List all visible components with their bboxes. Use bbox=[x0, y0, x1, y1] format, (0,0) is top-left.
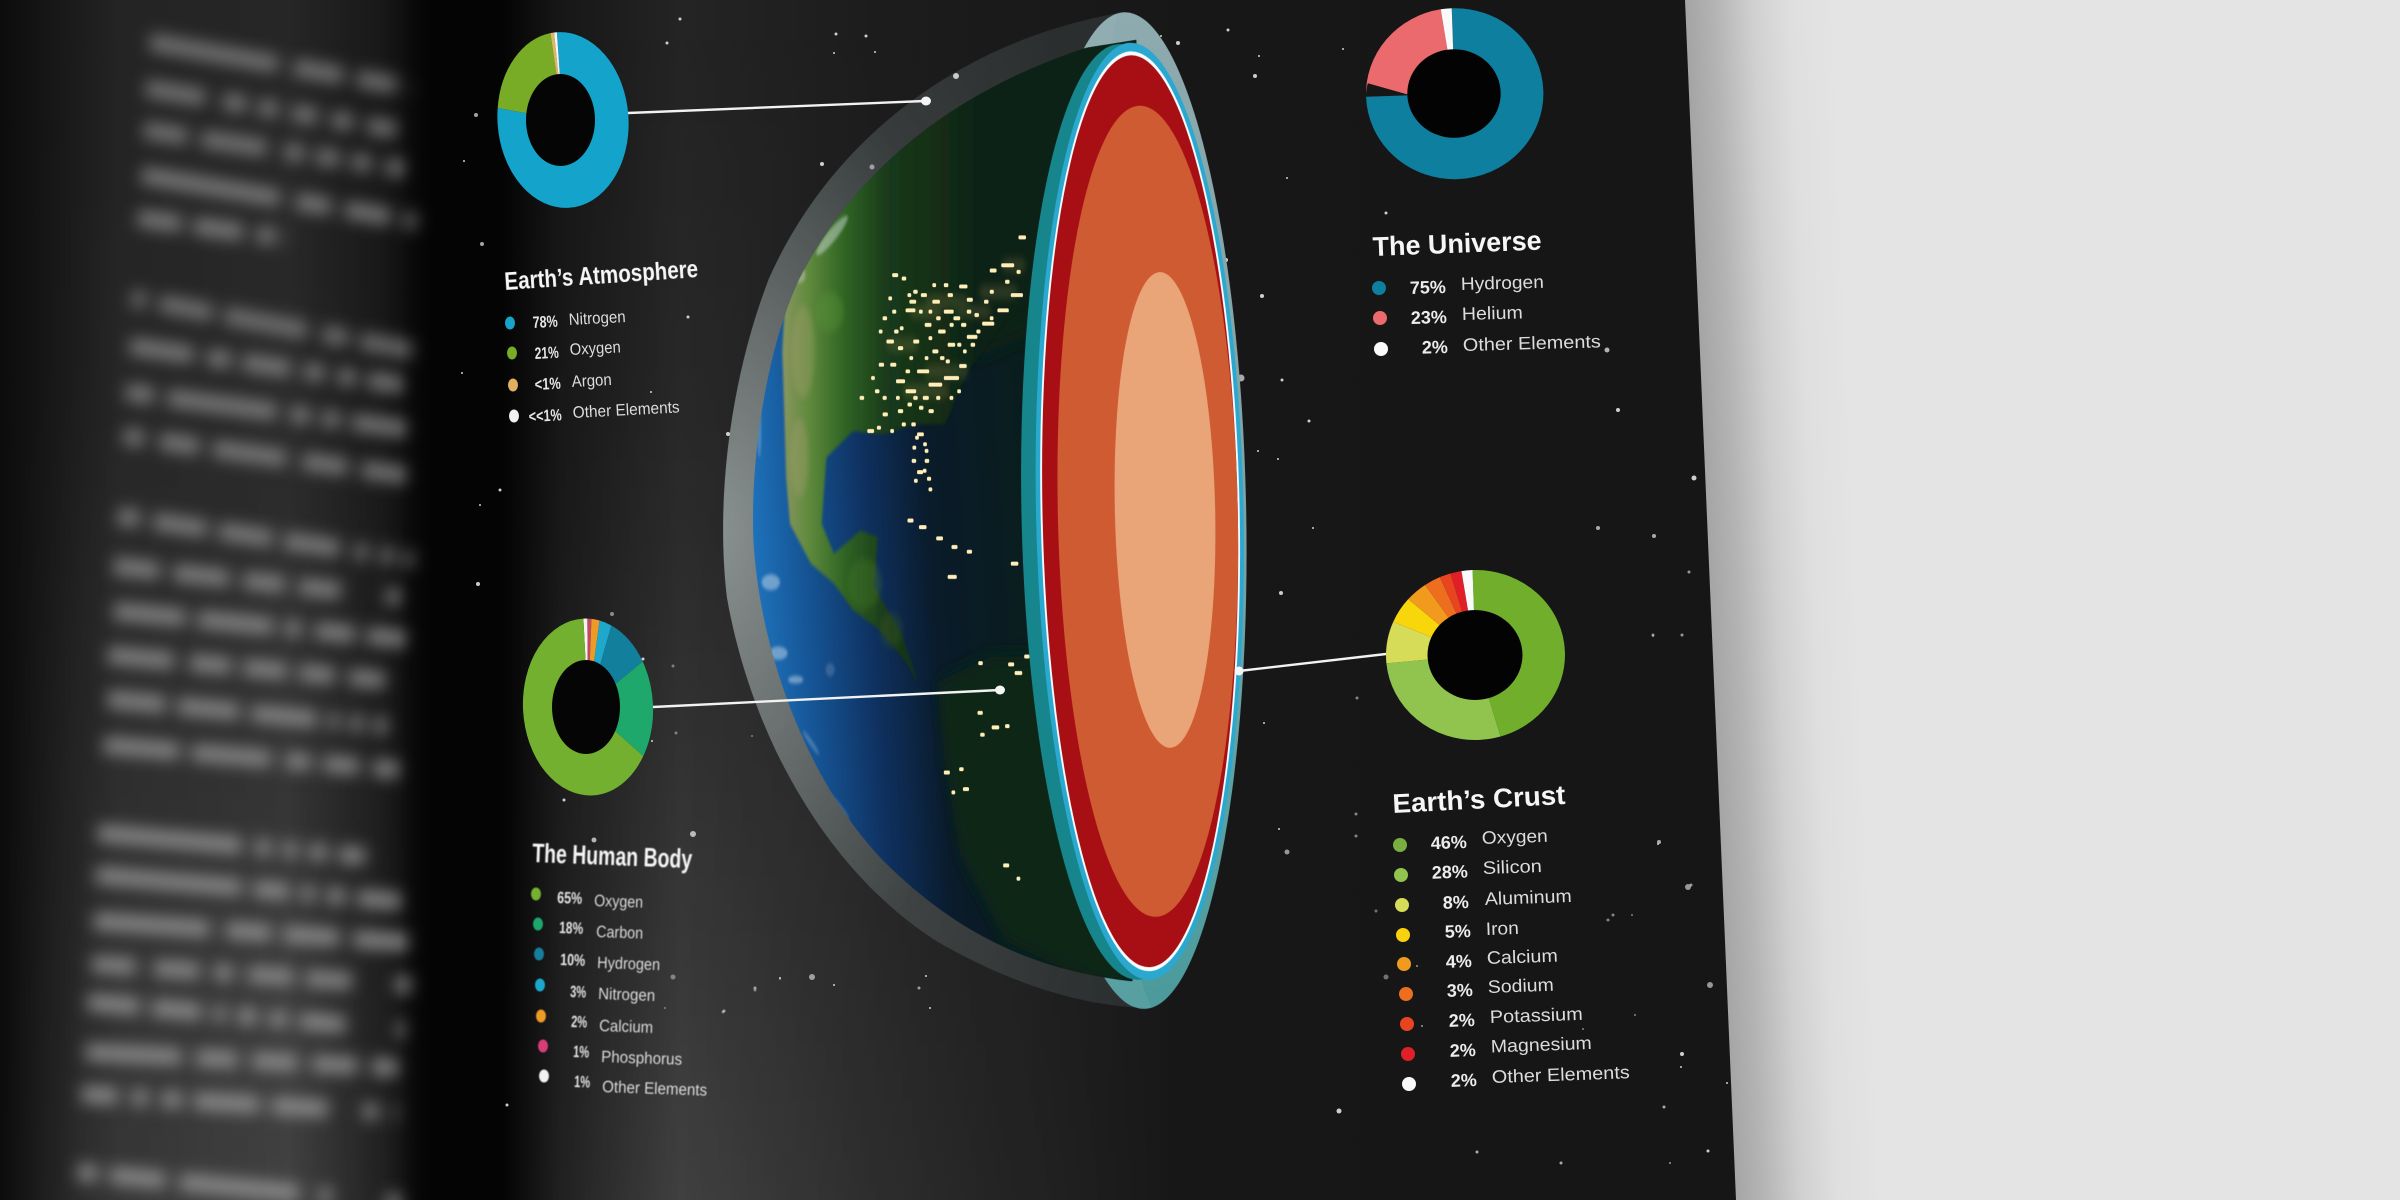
legend: crust: 28% bbox=[1431, 862, 1468, 883]
legend: human body bbox=[531, 888, 707, 1100]
blurred left page body text bbox=[78, 42, 440, 1200]
legend: human body: Phosphorus bbox=[601, 1048, 682, 1069]
legend: atmosphere: Oxygen bbox=[569, 338, 621, 359]
connector: atmosphere bbox=[628, 96, 931, 113]
outer core orange bbox=[1049, 100, 1247, 923]
legend: crust: 4% bbox=[1445, 951, 1472, 972]
legend: universe: Other Elements bbox=[1463, 331, 1601, 355]
legend: crust: 46% bbox=[1430, 832, 1467, 853]
heading: The Human Body: The Human Body bbox=[532, 838, 693, 874]
crust band bbox=[1011, 37, 1246, 987]
south america land bbox=[937, 656, 1121, 995]
legend: universe: 75% bbox=[1410, 277, 1446, 298]
dark night side tint bbox=[984, 40, 1136, 361]
legend: human body: 18% bbox=[559, 919, 584, 938]
legend: atmosphere: Nitrogen bbox=[568, 308, 626, 329]
connector: human body bbox=[653, 686, 1005, 707]
panel: The Human Body bbox=[531, 660, 707, 1100]
legend: atmosphere: <1% bbox=[534, 375, 561, 394]
legend: crust: 8% bbox=[1442, 892, 1469, 913]
legend: human body: Carbon bbox=[596, 923, 643, 943]
legend: atmosphere: <<1% bbox=[528, 406, 562, 426]
legend: crust: Iron bbox=[1485, 918, 1519, 939]
heading: Earth's Atmosphere: Earth’s Atmosphere bbox=[504, 255, 699, 296]
legend: universe: 2% bbox=[1422, 337, 1448, 358]
legend: crust: 5% bbox=[1444, 921, 1471, 942]
donut chart: crust bbox=[1428, 610, 1522, 700]
legend: crust: 3% bbox=[1446, 980, 1473, 1001]
magazine edge shadow bbox=[1680, 0, 1900, 1200]
globe surface bbox=[738, 27, 1178, 995]
donut chart: human body bbox=[552, 660, 623, 754]
donut chart: universe bbox=[1407, 49, 1501, 138]
white ring bbox=[1030, 45, 1250, 978]
legend: universe bbox=[1372, 272, 1601, 358]
legend: crust: 2% bbox=[1450, 1070, 1477, 1091]
legend: atmosphere: 78% bbox=[532, 313, 558, 332]
panel: Earth's Atmosphere bbox=[504, 74, 699, 426]
legend: crust: Other Elements bbox=[1491, 1062, 1630, 1087]
stars bbox=[461, 18, 1728, 1164]
legend: atmosphere: Other Elements bbox=[572, 398, 680, 422]
legend: human body: 3% bbox=[570, 983, 587, 1002]
legend: atmosphere bbox=[505, 308, 680, 426]
panel: Earth's Crust bbox=[1392, 610, 1630, 1091]
heading: The Universe: The Universe bbox=[1372, 226, 1542, 262]
legend: crust: Potassium bbox=[1489, 1004, 1583, 1027]
legend: crust: Silicon bbox=[1482, 856, 1542, 878]
legend: human body: Oxygen bbox=[594, 892, 643, 912]
legend: crust: Calcium bbox=[1486, 946, 1558, 968]
city lights bbox=[861, 237, 1049, 879]
legend: atmosphere: Argon bbox=[571, 371, 612, 391]
clouds bbox=[757, 211, 850, 822]
legend: crust: Sodium bbox=[1487, 975, 1554, 997]
legend: human body: Hydrogen bbox=[597, 954, 660, 974]
legend: crust: Magnesium bbox=[1490, 1033, 1592, 1056]
gutter darkening over text bbox=[400, 0, 448, 1200]
legend: crust bbox=[1393, 826, 1630, 1091]
legend: human body: 10% bbox=[560, 951, 586, 970]
donut chart: atmosphere bbox=[526, 74, 599, 166]
north america land bbox=[782, 27, 1121, 683]
legend: human body: 1% bbox=[574, 1073, 591, 1092]
city lights glow bbox=[891, 265, 1021, 391]
legend: crust: Aluminum bbox=[1484, 886, 1572, 909]
cyan outer ring bbox=[1026, 36, 1254, 987]
inner core bbox=[1109, 268, 1221, 751]
legend: human body: Calcium bbox=[599, 1017, 653, 1037]
legend: universe: 23% bbox=[1411, 307, 1447, 328]
legend: human body: 1% bbox=[573, 1043, 590, 1062]
legend: human body: Other Elements bbox=[602, 1078, 707, 1100]
legend: crust: Oxygen bbox=[1481, 826, 1548, 848]
legend: universe: Helium bbox=[1462, 302, 1523, 324]
legend: crust: 2% bbox=[1449, 1040, 1476, 1061]
legend: human body: Nitrogen bbox=[598, 985, 655, 1005]
legend: human body: 65% bbox=[557, 889, 583, 908]
heading: Earth's Crust: Earth’s Crust bbox=[1392, 780, 1566, 819]
atmosphere shell cut face bbox=[1012, 5, 1257, 1016]
panel: The Universe bbox=[1372, 49, 1601, 358]
mantle dark red bbox=[1032, 49, 1248, 974]
legend: human body: 2% bbox=[571, 1013, 588, 1032]
atmosphere dome bbox=[723, 13, 1152, 1008]
gutter shade bbox=[448, 0, 491, 1200]
legend: atmosphere: 21% bbox=[534, 344, 559, 363]
magazine spread bbox=[0, 0, 1736, 1200]
legend: crust: 2% bbox=[1448, 1010, 1475, 1031]
Earth cutaway bbox=[723, 5, 1257, 1016]
connector: crust bbox=[1234, 654, 1386, 676]
north america highlights bbox=[790, 292, 903, 647]
legend: universe: Hydrogen bbox=[1461, 272, 1544, 294]
